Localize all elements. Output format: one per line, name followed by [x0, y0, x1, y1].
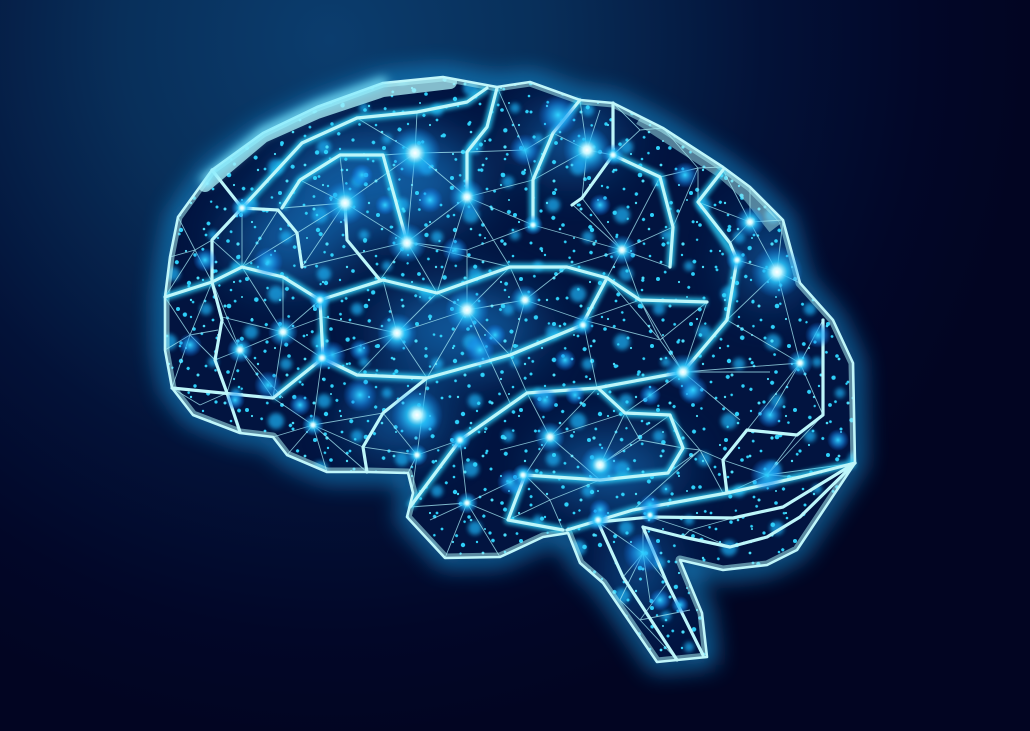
brain folds: [165, 88, 855, 660]
outer brain glow: [165, 77, 855, 662]
rim facets: [165, 77, 855, 662]
bright rim glow: [205, 82, 383, 180]
fold highlights glow: [165, 88, 855, 530]
soft glow nodes: [178, 95, 849, 614]
glowing nodes: [227, 126, 813, 531]
blue glow clouds: [230, 110, 800, 610]
brain outline: [165, 77, 855, 662]
polygon mesh: [165, 87, 855, 660]
illustration: glowing polygonal brain on navy: [0, 0, 880, 684]
brain: [150, 70, 870, 670]
particle field: [150, 70, 870, 670]
brain body fill: [165, 77, 855, 662]
soft particle halos: [150, 70, 870, 670]
interior light and particles: [150, 70, 870, 670]
